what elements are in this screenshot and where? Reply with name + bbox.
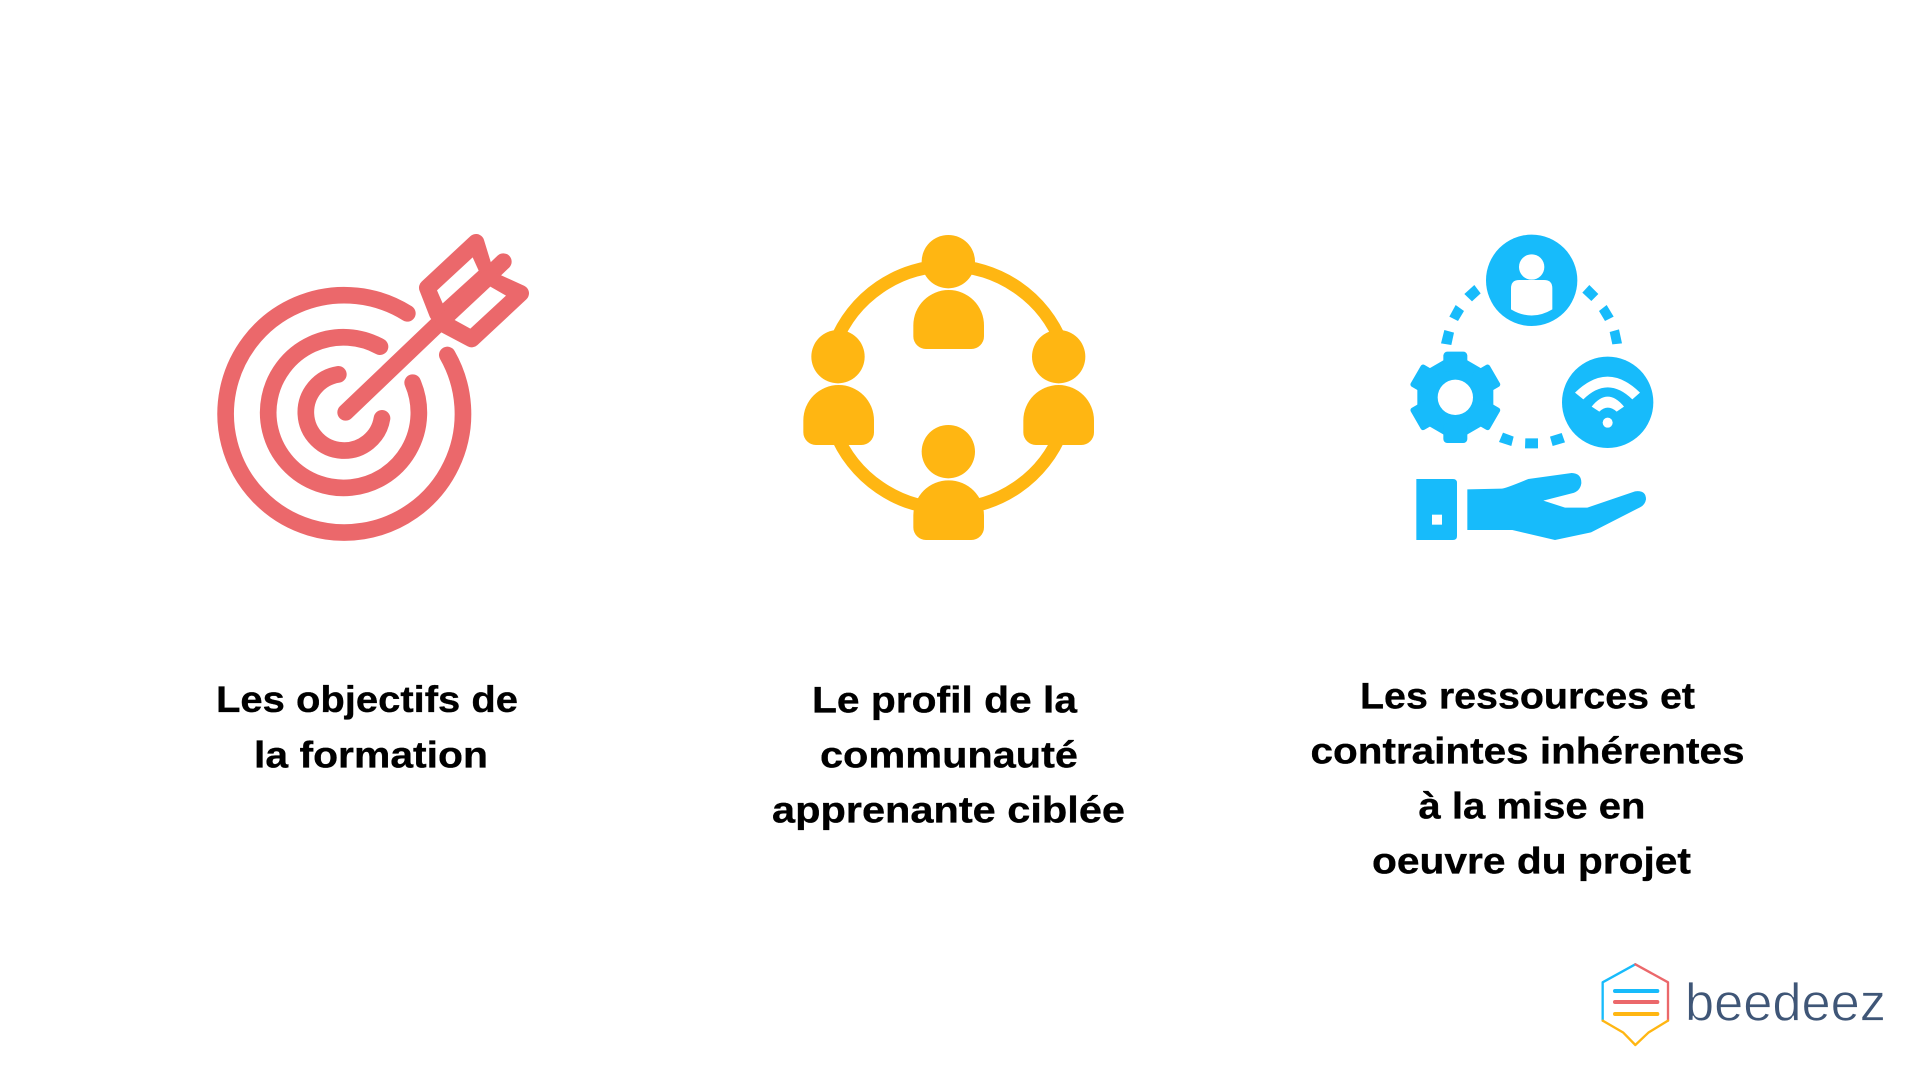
text: resources and constraints: à la mise en	[1418, 786, 1646, 826]
icon: wifi in circle	[1562, 357, 1653, 448]
text: objectives: la formation	[254, 734, 488, 776]
logo mark: hexagon	[1603, 964, 1668, 1045]
text: resources and constraints: oeuvre du projet	[1372, 840, 1691, 882]
text: learner profile	[772, 680, 1125, 830]
icon: open hand with cuff	[1416, 473, 1646, 540]
text: objectives	[216, 679, 518, 776]
text: learner profile: communauté	[820, 734, 1078, 776]
text: learner profile: apprenante ciblée	[772, 790, 1125, 830]
icon: community of people in a circle	[803, 235, 1094, 540]
text: resources and constraints	[1310, 676, 1744, 882]
text: resources and constraints: Les ressources et	[1360, 676, 1695, 716]
text: resources and constraints: contraintes inhérentes	[1310, 730, 1744, 772]
icon: resources and constraints	[1409, 235, 1653, 540]
logo wordmark: beedeez	[1685, 974, 1886, 1032]
icon: person in circle	[1486, 235, 1577, 326]
logo: beedeez	[1603, 964, 1886, 1045]
text: learner profile: Le profil de la	[812, 680, 1077, 720]
icon: target with arrow	[226, 242, 521, 533]
icon: gear	[1409, 352, 1501, 443]
text: objectives: Les objectifs de	[216, 679, 518, 720]
dotted circle connecting the icons	[1441, 285, 1622, 448]
